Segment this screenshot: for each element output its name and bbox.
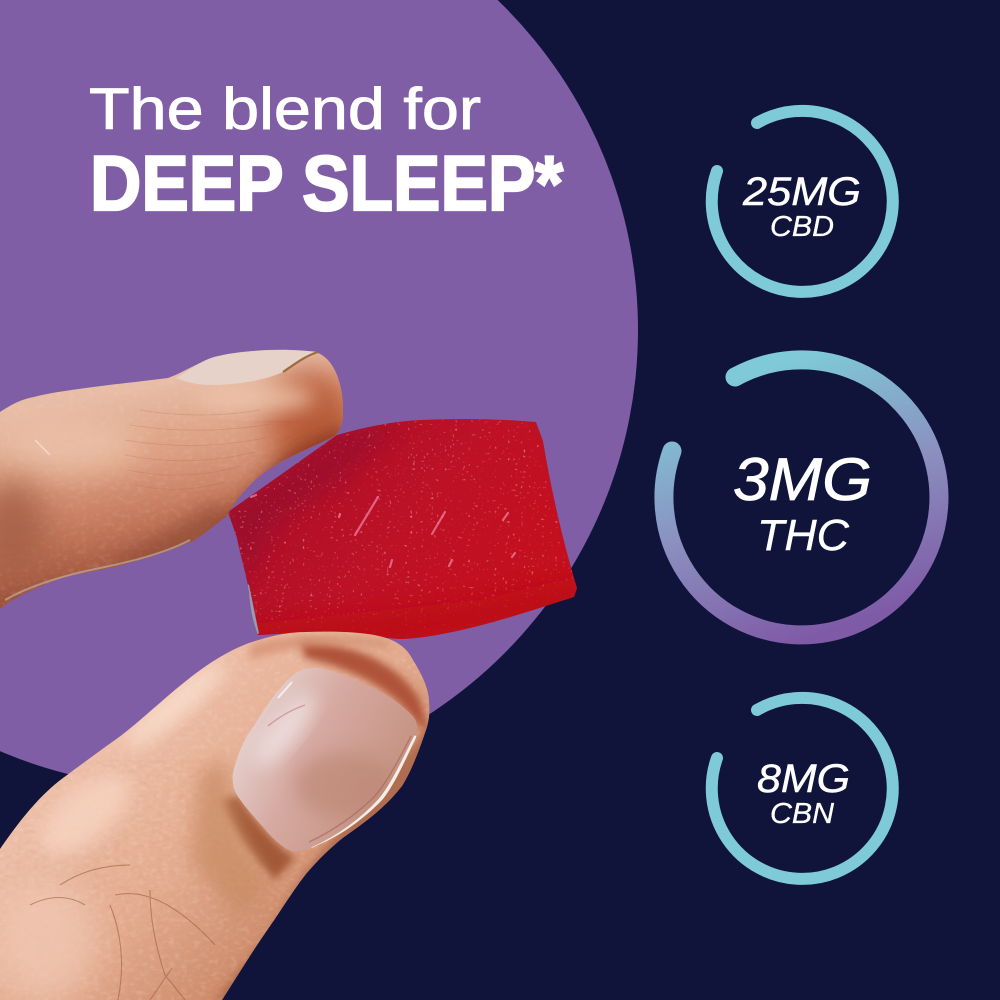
gummy embossed marks bbox=[251, 495, 515, 567]
value: 25MG bbox=[742, 170, 861, 214]
label: CBN bbox=[770, 798, 834, 830]
ring stat: 25MG CBD bbox=[712, 111, 893, 292]
ring stat: 8MG CBN bbox=[712, 698, 893, 879]
value: 8MG bbox=[757, 757, 850, 801]
thumb tip rim shading bbox=[300, 642, 430, 735]
value: 3MG bbox=[733, 446, 872, 513]
label: CBD bbox=[770, 211, 834, 243]
ring stat: 3MG THC bbox=[664, 360, 939, 635]
heading line: DEEP SLEEP: DEEP SLEEP* bbox=[90, 139, 564, 227]
skin creases bbox=[30, 865, 215, 1000]
upper fingernail bbox=[176, 350, 318, 385]
purple circle bbox=[0, 0, 638, 788]
heading line: The blend for: The blend for bbox=[89, 77, 481, 142]
cuticle crease bbox=[222, 795, 295, 880]
title bbox=[89, 77, 564, 227]
red gummy bbox=[225, 415, 585, 650]
label: THC bbox=[757, 511, 850, 560]
thumbnail bbox=[233, 668, 417, 852]
upper finger bbox=[0, 345, 357, 615]
fingerprint ridges bbox=[125, 410, 270, 489]
fingertip shading bbox=[267, 370, 357, 470]
thumb bbox=[0, 630, 440, 1000]
